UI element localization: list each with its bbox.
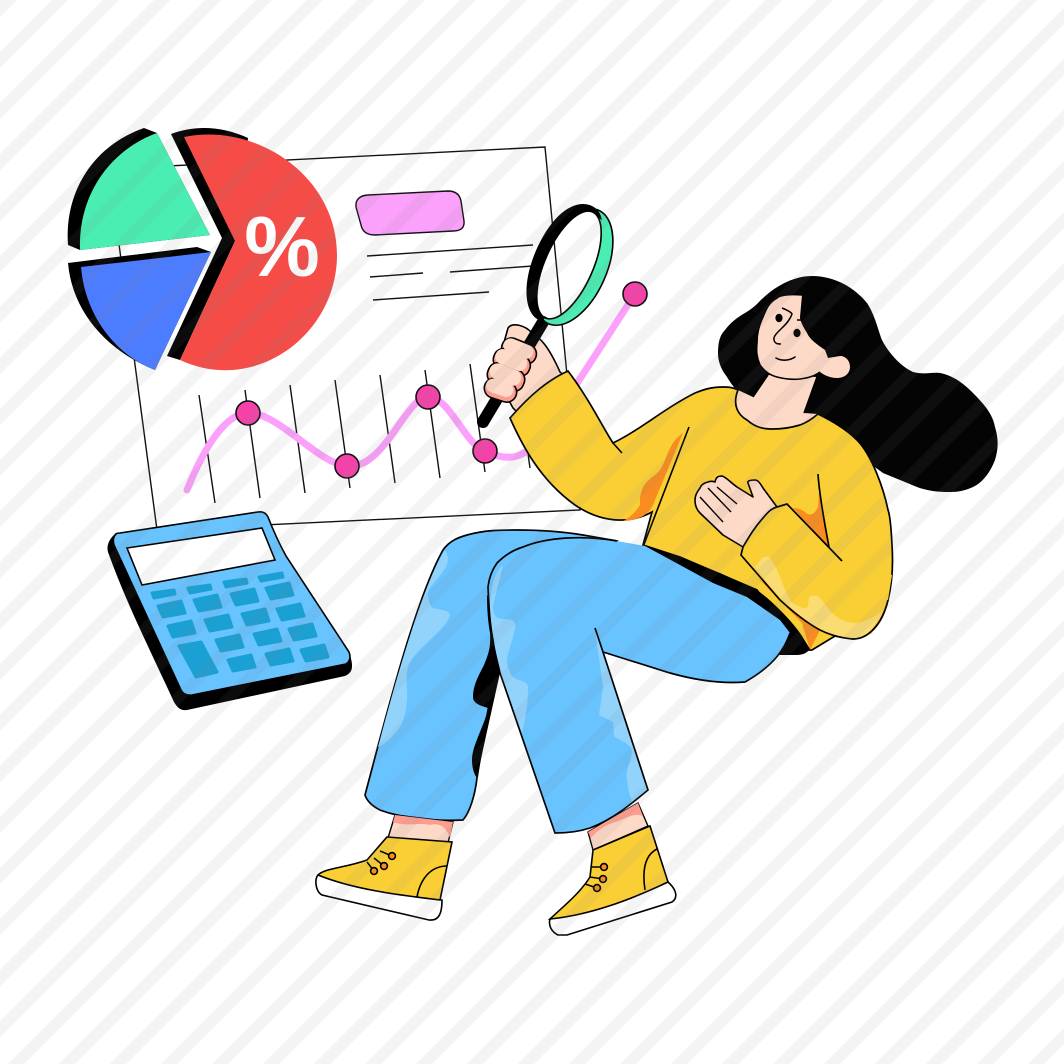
calculator keys	[152, 573, 328, 677]
sleeve shading	[793, 493, 828, 547]
pie chart	[68, 128, 337, 370]
face	[753, 295, 850, 413]
left laces	[367, 851, 392, 871]
hair	[718, 276, 998, 492]
left ankle	[388, 815, 453, 843]
nose and brow	[774, 308, 801, 344]
finger lines	[700, 487, 737, 522]
back leg highlight	[378, 550, 450, 747]
leg gap shadow	[472, 595, 500, 778]
right sneaker	[549, 826, 676, 935]
calculator screen	[127, 528, 275, 585]
calculator	[107, 512, 352, 710]
pie slice: blue	[68, 247, 211, 370]
pie slice: red with percent sign	[167, 128, 337, 370]
calculator base	[107, 512, 352, 710]
magnifying glass	[483, 193, 629, 422]
smile	[776, 357, 795, 360]
eyes	[775, 314, 801, 337]
pink label pill	[356, 191, 464, 235]
right hand on chest	[695, 476, 777, 547]
left ankle shadow	[393, 815, 453, 838]
right laces	[585, 867, 604, 888]
pie slice: green	[68, 128, 210, 250]
chart curve	[187, 294, 635, 490]
lower sweater shading	[757, 577, 820, 650]
pie slice: red with percent sign: %	[244, 200, 320, 295]
magnifier handle	[483, 322, 543, 422]
left sole	[316, 875, 442, 920]
face outline	[757, 295, 820, 379]
front leg trousers	[488, 538, 790, 833]
sleeve outlines	[741, 474, 888, 639]
document sheet	[109, 147, 580, 530]
chart data points	[236, 282, 647, 478]
right sole	[549, 882, 676, 935]
document text lines	[367, 245, 533, 300]
back leg trousers	[365, 530, 617, 820]
sweater waist shadow	[645, 546, 810, 655]
right sleeve	[741, 474, 892, 639]
neck	[736, 375, 818, 429]
right ankle shadow	[588, 803, 643, 838]
chart grid lines	[199, 360, 530, 503]
front leg highlights	[490, 565, 528, 733]
magnifier rim	[511, 193, 629, 337]
sweater shading left	[623, 433, 683, 521]
right ankle	[588, 803, 648, 850]
calculator face	[113, 512, 350, 695]
front leg outline	[488, 538, 790, 833]
neck shadow lines	[753, 375, 817, 413]
sweater	[510, 371, 893, 650]
left sneaker	[316, 837, 452, 920]
left hand palm holding magnifier	[495, 325, 570, 415]
sweater fold line	[613, 427, 689, 547]
sleeve highlight	[755, 556, 883, 639]
line chart	[187, 282, 647, 503]
fingers	[482, 335, 539, 405]
